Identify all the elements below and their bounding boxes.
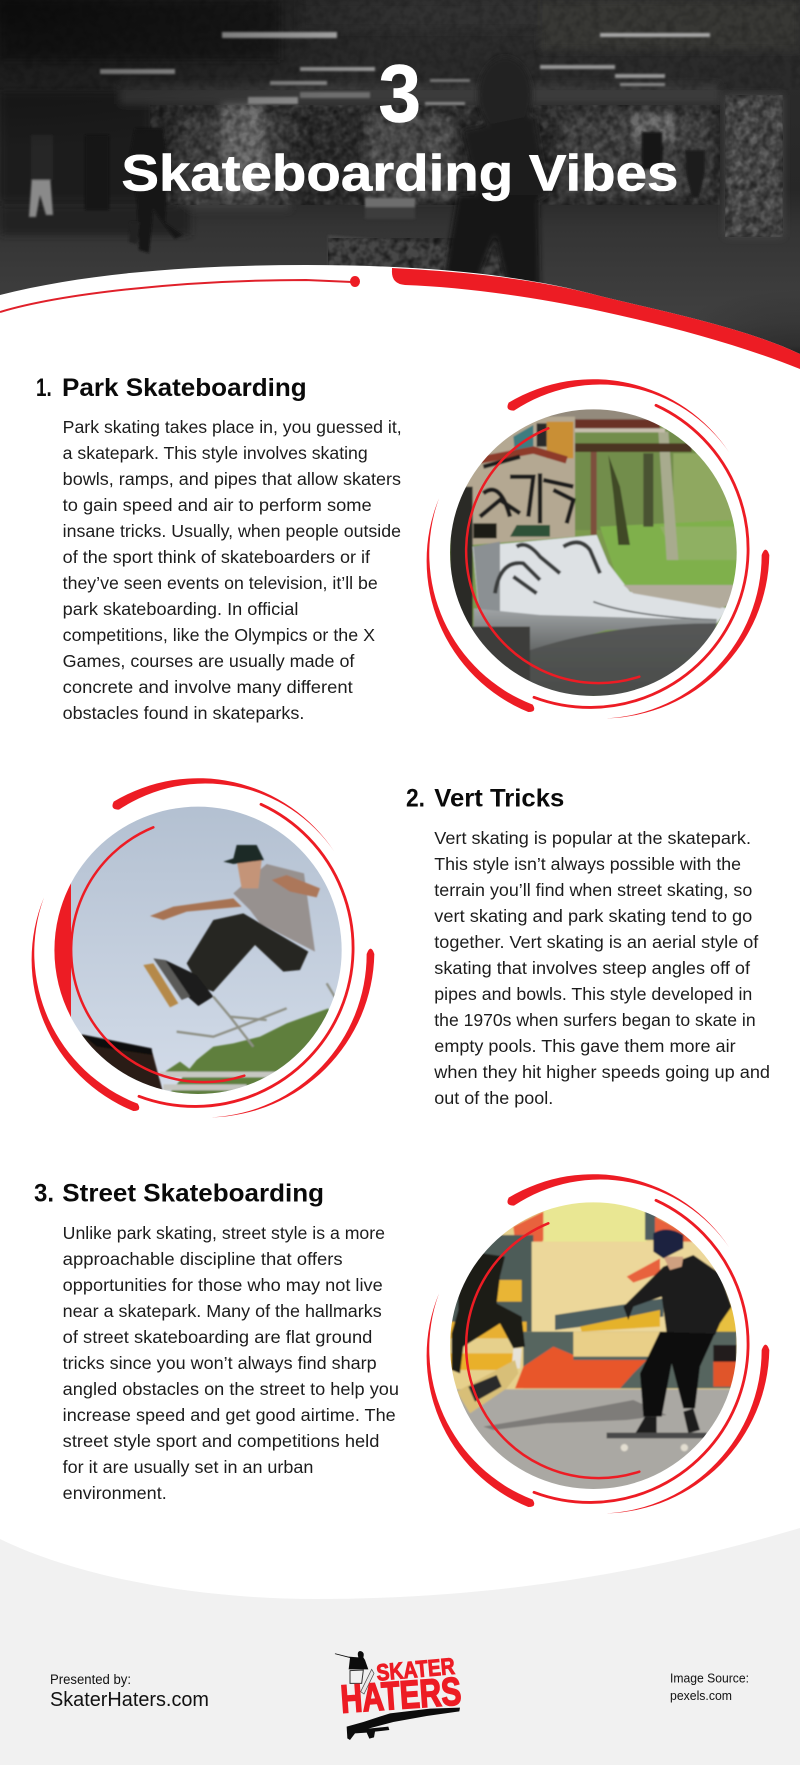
grey footer band: [0, 1528, 800, 1765]
photo 2: skater mid-air against the sky: [71, 806, 342, 1094]
title: Skateboarding Vibes: [121, 145, 678, 202]
section 2 heading: 2.: [406, 785, 425, 813]
title: 3: [378, 48, 421, 140]
section 2 body text: the 1970s when surfers began to skate in: [434, 1010, 756, 1030]
section 1 body text: a skatepark. This style involves skating: [63, 443, 368, 463]
section 1 body text: to gain speed and air to perform some: [63, 495, 372, 515]
section 1 heading: Park Skateboarding: [62, 374, 307, 402]
footer: logo: SKATER: [375, 1653, 456, 1686]
thick red swoosh: [392, 268, 800, 369]
section 1 body text: competitions, like the Olympics or the X: [63, 625, 375, 645]
section 1 body text: Park skating takes place in, you guessed it,: [63, 417, 402, 437]
section 1 body text: of the sport think of skateboarders or if: [63, 547, 370, 567]
section 3 body text: increase speed and get good airtime. The: [63, 1405, 396, 1425]
section 2 body text: [433, 828, 770, 1108]
section 3 body text: for it are usually set in an urban: [63, 1457, 313, 1477]
section 2 body text: This style isn’t always possible with the: [434, 854, 741, 874]
footer: presented by: SkaterHaters.com: [50, 1689, 209, 1711]
section 3 body text: near a skatepark. Many of the hallmarks: [63, 1301, 382, 1321]
section 2 body text: when they hit higher speeds going up and: [433, 1062, 770, 1082]
title: [121, 48, 678, 202]
section 2 body text: vert skating and park skating tend to go: [434, 906, 752, 926]
section 3 heading: 3.: [34, 1180, 54, 1208]
footer: logo: HATERS: [339, 1669, 463, 1722]
section 1 body text: [63, 417, 402, 723]
section 2 body text: out of the pool.: [434, 1088, 553, 1108]
section 2 body text: Vert skating is popular at the skatepark.: [434, 828, 751, 848]
section 1 heading: 1.: [36, 374, 52, 402]
section 1 body text: concrete and involve many different: [63, 677, 353, 697]
ring accent around photo 2: [32, 778, 374, 1117]
footer: image source: pexels.com: [670, 1689, 732, 1703]
footer: presented by: Presented by:: [50, 1672, 131, 1687]
ring accent around photo 3: [427, 1174, 769, 1513]
section 3 body text: Unlike park skating, street style is a more: [63, 1223, 385, 1243]
section 2 body text: skating that involves steep angles off of: [434, 958, 750, 978]
footer: logo: [335, 1651, 463, 1740]
footer: image source: Image Source:: [670, 1672, 749, 1686]
section 3 body text: approachable discipline that offers: [63, 1249, 343, 1269]
section 1 body text: obstacles found in skateparks.: [63, 703, 304, 723]
photo 3: street skaters in front of a mural: [447, 1200, 740, 1496]
photo 1: concrete skate ramp with graffiti: [447, 407, 740, 700]
ring accent around photo 1: [427, 379, 769, 718]
section 3 body text: environment.: [63, 1483, 167, 1503]
section 1 body text: insane tricks. Usually, when people outside: [63, 521, 401, 541]
section 2 body text: together. Vert skating is an aerial style of: [434, 932, 758, 952]
section 3 body text: [63, 1223, 399, 1503]
section 3 body text: opportunities for those who may not live: [63, 1275, 383, 1295]
section 1 body text: park skateboarding. In official: [63, 599, 298, 619]
section 3 body text: street style sport and competitions held: [63, 1431, 379, 1451]
section 3 heading: Street Skateboarding: [62, 1180, 324, 1208]
section 2 red crescent behind photo: [54, 883, 71, 1017]
section 1 body text: Games, courses are usually made of: [63, 651, 355, 671]
section 3 body text: angled obstacles on the street to help you: [63, 1379, 399, 1399]
section 3 body text: tricks since you won’t always find sharp: [63, 1353, 377, 1373]
section 1 body text: bowls, ramps, and pipes that allow skaters: [63, 469, 401, 489]
section 2 body text: empty pools. This gave them more air: [434, 1036, 736, 1056]
footer: image source: [670, 1672, 749, 1703]
section 2 body text: pipes and bowls. This style developed in: [434, 984, 752, 1004]
section 1 body text: they’ve seen events on television, it’ll be: [63, 573, 378, 593]
thin red swoosh with dot: [0, 276, 360, 312]
footer: presented by: [50, 1672, 209, 1711]
section 2 heading: Vert Tricks: [434, 785, 564, 813]
header photo: skatepark undercroft: [0, 0, 800, 380]
section 3 body text: of street skateboarding are flat ground: [63, 1327, 372, 1347]
section 2 body text: terrain you’ll find when street skating, so: [434, 880, 752, 900]
